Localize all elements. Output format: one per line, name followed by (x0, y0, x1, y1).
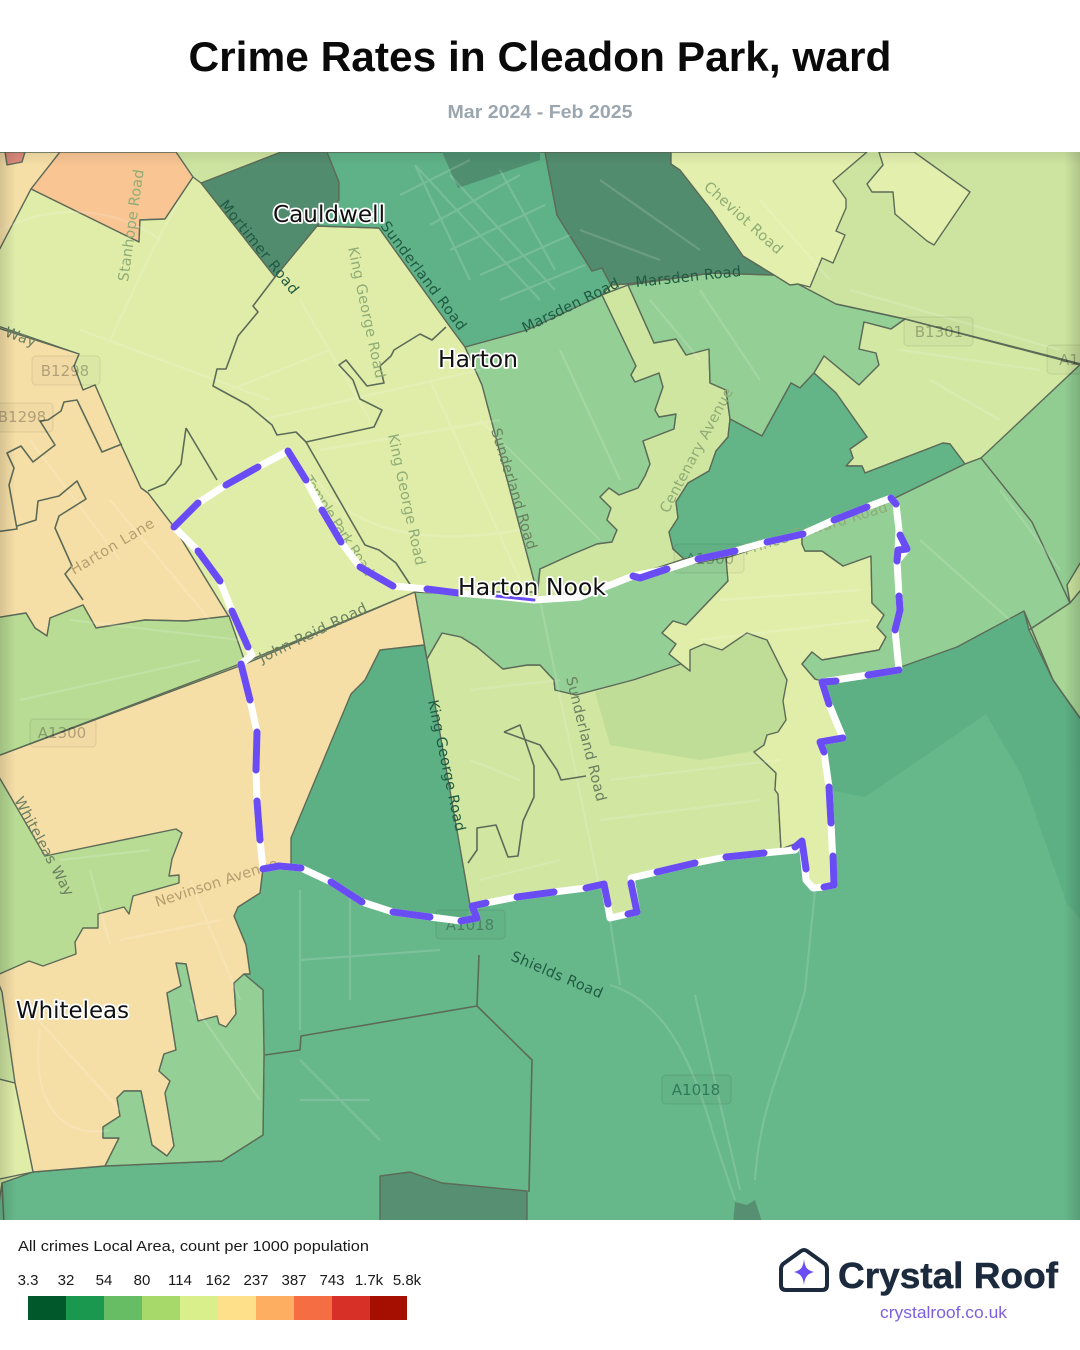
road labels: pale: King George Road (384, 433, 428, 567)
legend tick labels (18, 1272, 422, 1289)
choropleth map (0, 152, 1080, 1230)
logo: Crystal Roof (781, 1250, 1059, 1296)
road labels: black-lined (3, 325, 609, 899)
legend tick labels: 743 (319, 1272, 345, 1289)
logo wordmark: Crystal Roof (838, 1255, 1059, 1296)
legend tick labels: 3.3 (18, 1272, 38, 1289)
legend tick labels: 387 (281, 1272, 307, 1289)
road labels: beige: Harton Lane (68, 516, 158, 578)
road labels: dark green: King George Road (424, 699, 468, 833)
road labels: pale: Stanhope Road (116, 168, 148, 283)
region: west beige (0, 327, 229, 636)
road labels: pale: Cheviot Road (700, 179, 785, 258)
legend colour scale (28, 1296, 407, 1320)
road labels: beige (68, 516, 280, 911)
legend tick labels: 162 (205, 1272, 231, 1289)
place labels: Harton (438, 347, 518, 373)
place labels: Whiteleas (16, 998, 129, 1024)
legend tick labels: 5.8k (393, 1272, 422, 1289)
region: central pale lobe and strip (662, 533, 886, 888)
legend tick labels: 54 (96, 1272, 112, 1289)
region: top-right pale (671, 152, 867, 287)
ward boundary: Cleadon Park (174, 451, 907, 921)
map boundary lines (0, 277, 1080, 1225)
road labels: pale: Prince Edward Road (741, 500, 890, 559)
road shield labels (0, 323, 1079, 934)
road labels: dark green: Marsden Road (635, 264, 742, 291)
road shield labels: A1 (1059, 351, 1079, 369)
road labels: pale: King George Road (344, 246, 388, 380)
region: Whiteleas Way light green (0, 770, 182, 976)
region: top central green (317, 152, 611, 347)
road labels: dark green: Marsden Road (520, 276, 622, 337)
road shield label: A1018: A1018 (672, 1081, 720, 1099)
road labels: dark green: Shields Road (508, 949, 605, 1002)
road labels: black-lined: Sunderland Road (487, 426, 539, 552)
region: large pale north-west (0, 177, 537, 662)
road labels: pale (116, 168, 890, 579)
road shield labels: A1300 (686, 550, 734, 568)
streets: south estate (300, 890, 815, 1200)
road shield labels: A1300 (38, 724, 86, 742)
region: south-west beige (0, 592, 427, 1172)
region: top dark patch (442, 152, 540, 188)
place labels: Cauldwell (273, 202, 385, 228)
road labels: black-lined: Whiteleas Way (10, 794, 76, 899)
road labels: pale: Centenary Avenue (657, 386, 737, 516)
region: far west pale sliver (0, 1078, 33, 1180)
region: top left beige strip (0, 152, 59, 246)
region: south-west green lobe (103, 963, 264, 1166)
place labels (16, 202, 607, 1024)
streets: top central grid (400, 160, 700, 300)
website link: crystalroof.co.uk (880, 1304, 1008, 1322)
region: east mid green (802, 458, 1070, 681)
map edge shading (0, 152, 1080, 1220)
region: west light green (0, 605, 245, 757)
region: top dark green left (201, 152, 339, 277)
legend tick labels: 114 (168, 1272, 192, 1289)
region: far east lower green (1029, 585, 1080, 725)
region: Centenary Avenue pale strip (537, 285, 730, 598)
road shield labels: A1018 (446, 916, 494, 934)
legend tick labels: 80 (134, 1272, 150, 1289)
legend title: All crimes Local Area, count per 1000 population (18, 1238, 369, 1255)
region: park patch (595, 633, 787, 760)
road labels: beige: Nevinson Avenue (153, 856, 280, 911)
legend tick labels: 237 (243, 1272, 269, 1289)
region: bottom dark notch (734, 1200, 762, 1220)
region: small red area (5, 152, 25, 165)
region: north-east pale (814, 319, 1080, 473)
legend tick labels: 1.7k (355, 1272, 384, 1289)
road labels: pale: Temple Park Road (299, 473, 376, 579)
place labels: Harton Nook (458, 575, 607, 601)
road labels: black-lined: Sunderland Road (562, 675, 609, 803)
road labels: dark green: Sunderland Road (377, 219, 469, 334)
region: peach area (31, 152, 193, 242)
region: top dark green right (545, 152, 774, 285)
region: bottom dark patch (379, 1171, 528, 1220)
region: north-east mid green (628, 273, 905, 436)
region: far east green (981, 360, 1080, 603)
legend tick labels: 32 (58, 1272, 74, 1289)
road labels: dark green (216, 197, 742, 1002)
region: south central pale (427, 633, 787, 918)
road labels: dark green: Mortimer Road (216, 197, 301, 298)
region: Harton mid green (465, 295, 676, 592)
road shield labels: B1298 (41, 362, 89, 380)
region: King George triangle darker green (291, 645, 470, 920)
road shields (0, 317, 1080, 1104)
title: Crime Rates in Cleadon Park, ward (188, 33, 892, 80)
ward dashes (174, 451, 907, 921)
region: Harton south dark green (669, 373, 965, 559)
region: central mid green (415, 557, 728, 695)
icon: house with star (781, 1250, 827, 1290)
region: top-right pale island (867, 152, 970, 245)
road labels: black-lined: Way (3, 325, 39, 351)
road labels: black-lined: John Reid Road (256, 600, 370, 667)
road shield labels: B1301 (915, 323, 963, 341)
region: south dark green (0, 714, 1080, 1220)
region: east field darker green (822, 611, 1080, 930)
streets: faint road network (0, 200, 1060, 1132)
date range subtitle: Mar 2024 - Feb 2025 (448, 102, 632, 122)
